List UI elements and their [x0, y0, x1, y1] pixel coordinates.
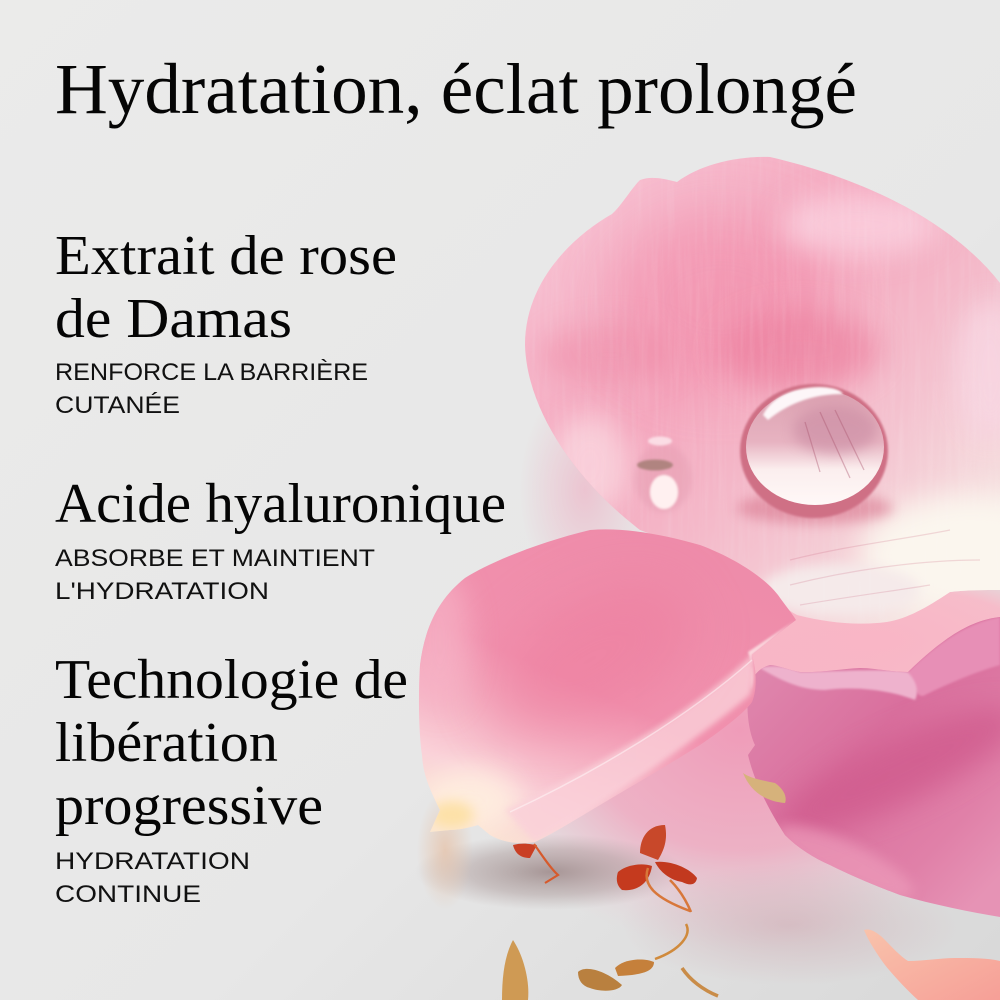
text block: Extrait de rose de Damas: de Damas	[55, 288, 292, 350]
text block: Extrait de rose de Damas: CUTANÉE	[55, 392, 180, 419]
text block: Extrait de rose de Damas: Extrait de rose	[55, 225, 397, 287]
icon: orange stamens	[502, 773, 786, 1000]
petal: bottom right	[860, 925, 1000, 1000]
icon: large water drop	[740, 384, 888, 518]
text block: Technologie de libération progressive	[55, 649, 408, 908]
text block: Acide hyaluronique: ABSORBE ET MAINTIENT	[55, 545, 375, 572]
text block: Technologie de libération progressive: CONTINUE	[55, 881, 201, 908]
petal: large upper petal	[525, 156, 1000, 624]
text block: Acide hyaluronique: L'HYDRATATION	[55, 578, 269, 605]
text block: Technologie de libération progressive: Technologie de	[55, 649, 408, 711]
text block: Technologie de libération progressive: HYDRATATION	[55, 848, 250, 875]
icon: red stamens	[617, 825, 697, 912]
icon: stamen under petal	[513, 844, 558, 883]
text block: Acide hyaluronique: Acide hyaluronique	[55, 473, 506, 535]
text block: Extrait de rose de Damas	[55, 225, 397, 419]
petal: right dark petal	[740, 610, 1000, 920]
text block: Extrait de rose de Damas: RENFORCE LA BARRIÈRE	[55, 359, 368, 386]
icon: small water drop	[634, 436, 692, 512]
text block: Acide hyaluronique	[55, 473, 506, 605]
title: Hydratation, éclat prolongé	[55, 49, 857, 129]
petal: centre petal	[419, 529, 796, 844]
text block: Technologie de libération progressive: libération	[55, 712, 278, 774]
text block: Technologie de libération progressive: progressive	[55, 775, 323, 837]
